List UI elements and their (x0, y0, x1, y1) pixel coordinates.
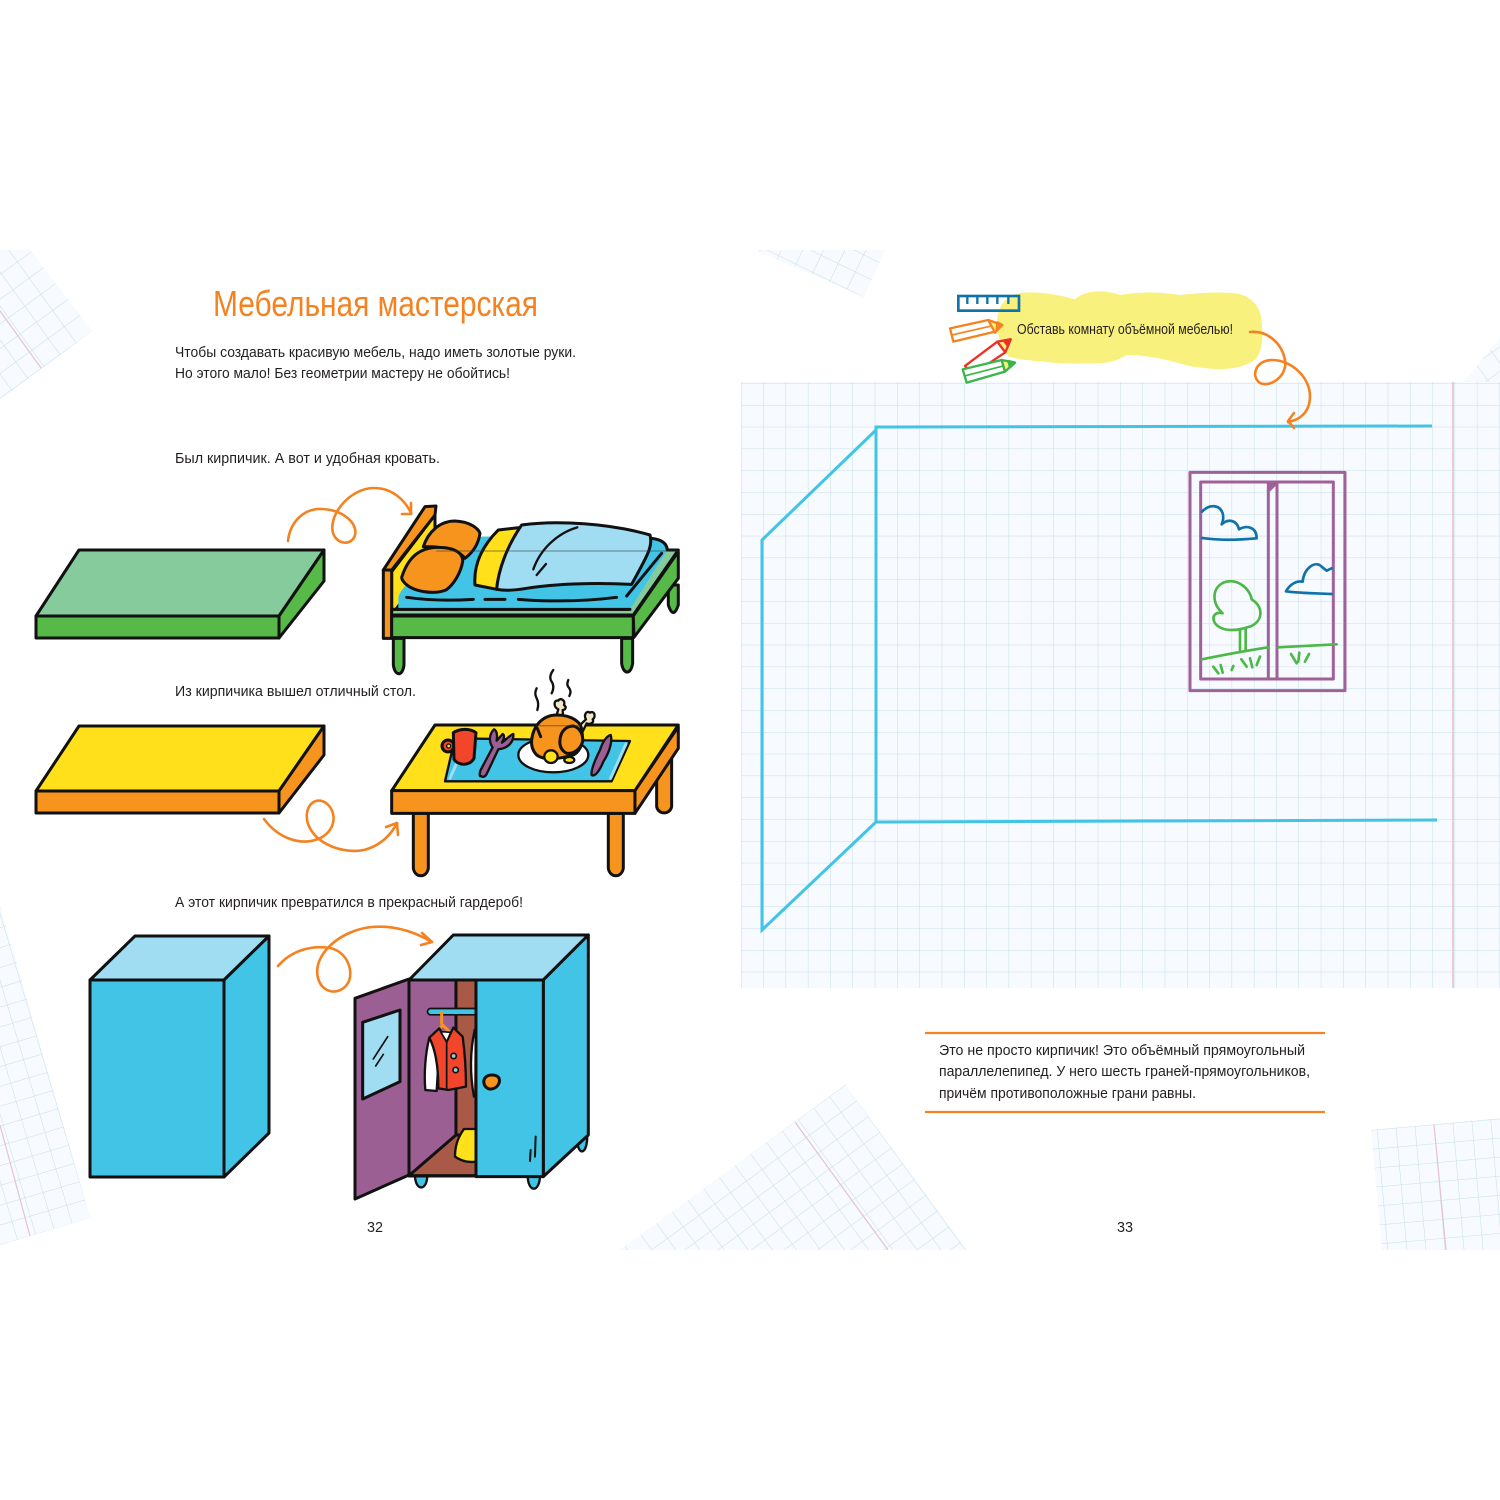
graph paper scrap: lower left (0, 905, 90, 1245)
page fold shadow (537, 724, 580, 728)
caption: bed: Был кирпичик. А вот и удобная кровать. (175, 450, 440, 467)
clothes rail (431, 1000, 475, 1024)
intro text: Но этого мало! Без геометрии мастеру не обойтись! (175, 365, 510, 382)
pillows (402, 521, 480, 592)
graph paper scrap: top left (0, 250, 92, 400)
window (1190, 472, 1345, 691)
window frame (1190, 472, 1345, 691)
bed frame (392, 550, 678, 638)
callout text: Обставь комнату объёмной мебелью! (1017, 321, 1233, 338)
icon: red pencil (965, 339, 1011, 375)
yellow callout blob (997, 291, 1262, 369)
graph paper scrap: top centre (755, 250, 885, 297)
right door (476, 980, 543, 1177)
cup (442, 729, 476, 764)
icon: orange pencil (950, 320, 1002, 342)
hanging jacket (425, 1012, 475, 1097)
fork (480, 729, 513, 777)
arrow: brick to bed (288, 488, 411, 543)
knife (592, 735, 611, 775)
caption: table: Из кирпичика вышел отличный стол. (175, 683, 416, 700)
page fold shadow (437, 549, 678, 553)
plate (518, 738, 588, 772)
page number 33: 33 (1117, 1219, 1133, 1236)
folded yellow cloth (455, 1129, 476, 1162)
bed legs (393, 585, 678, 674)
blanket (475, 523, 651, 590)
wardrobe (355, 935, 588, 1199)
blue brick (90, 936, 269, 1177)
icon: green pencil (963, 360, 1015, 383)
graph paper scrap: bottom right (1371, 1118, 1500, 1250)
fact box: Это не просто кирпичик! Это объёмный прямоугольный (939, 1042, 1305, 1059)
green brick (36, 550, 324, 638)
fact box: причём противоположные грани равны. (939, 1085, 1196, 1102)
wardrobe feet (415, 1137, 587, 1189)
fact box: параллелепипед. У него шесть граней-прямоугольников, (939, 1063, 1310, 1080)
page number 32: 32 (367, 1219, 383, 1236)
placemat (445, 738, 630, 781)
table legs (413, 757, 672, 876)
arrow: callout to room (1250, 332, 1310, 428)
graph paper scrap: bottom centre (620, 1085, 967, 1250)
headboard (383, 506, 436, 638)
yellow brick (36, 726, 324, 813)
table top (392, 725, 678, 813)
table (392, 670, 678, 876)
icon: ruler (958, 296, 1019, 311)
room outline (762, 426, 1437, 930)
wardrobe interior (409, 980, 476, 1176)
fact box (925, 1033, 1325, 1112)
clouds (1202, 506, 1332, 594)
tree and grass (1202, 581, 1337, 673)
arrow: brick to table (264, 801, 398, 851)
intro text (175, 344, 576, 382)
intro text: Чтобы создавать красивую мебель, надо иметь золотые руки. (175, 344, 576, 361)
wardrobe body (409, 935, 588, 1177)
arrow: brick to wardrobe (278, 927, 432, 992)
graph paper scrap: top right (1464, 338, 1500, 382)
title: Мебельная мастерская (213, 283, 538, 324)
mattress (393, 533, 667, 609)
roast chicken (532, 670, 595, 763)
open door with mirror (355, 979, 409, 1199)
caption: wardrobe: А этот кирпичик превратился в прекрасный гардероб! (175, 894, 523, 911)
graph paper sheet (741, 382, 1500, 988)
bed (383, 506, 678, 674)
